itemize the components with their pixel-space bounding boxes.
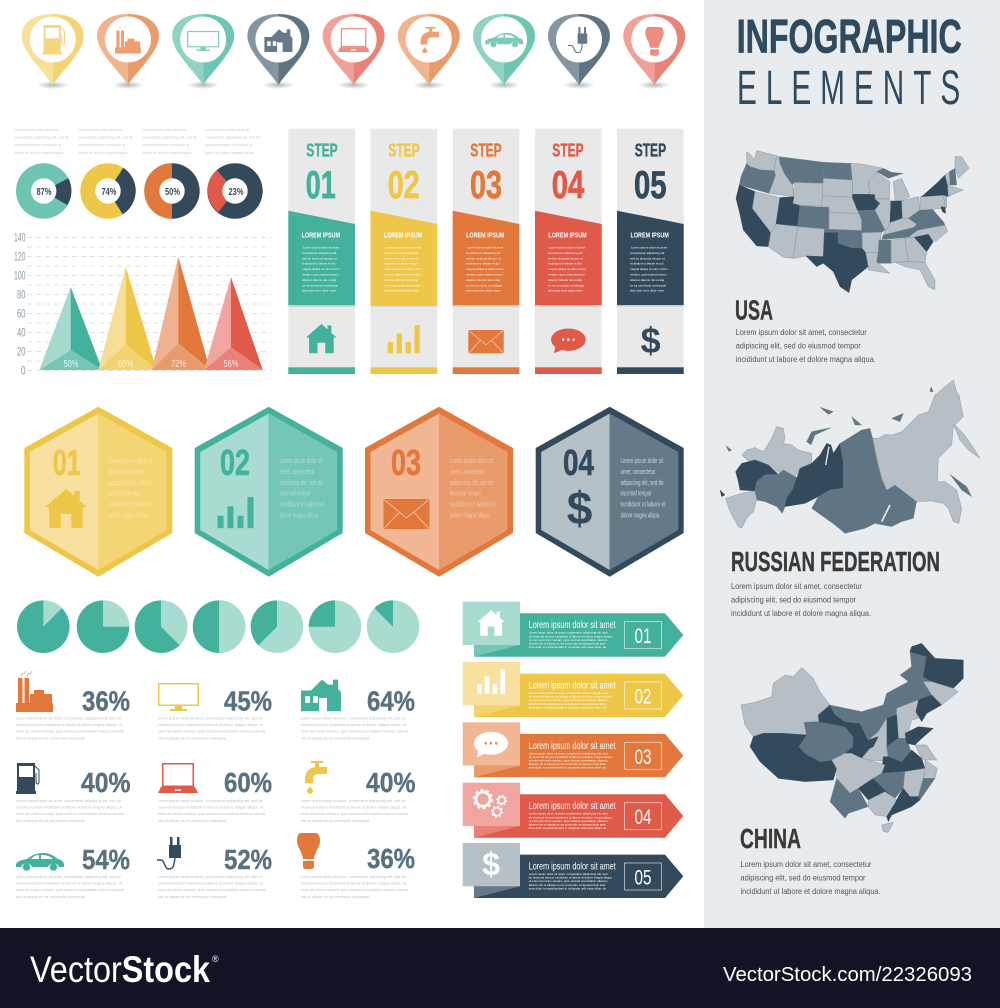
text: China: CHINA <box>740 823 801 854</box>
hexagon 04: adipiscing elit, sed do <box>620 478 664 487</box>
arrow banners <box>463 602 683 898</box>
stat: fuel pump 40%: enim ad minim veniam, quis nostrud exercitation ullamco laboris <box>16 812 124 816</box>
hexagon 03: Lorem ipsum dolor sit <box>450 456 494 465</box>
banner 04: laboris nisi ut aliquip ex ea commodo consequat duis aute <box>529 823 606 827</box>
step 05 card: consectetur adipiscing elit <box>630 251 665 255</box>
stat: house 64%: 64% <box>367 686 415 717</box>
stat: water tap 40%: 40% <box>366 767 416 798</box>
map: China <box>741 643 963 832</box>
hexagon 02: eiusmod tempor <box>280 488 311 498</box>
stat: laptop 60% <box>158 763 272 823</box>
captions above donuts: consectetur adipiscing elit, sed do <box>205 136 260 140</box>
text: China: Lorem ipsum dolor sit amet, consectetur <box>740 860 872 869</box>
stat: water tap 40%: eiusmod tempor incididunt ut labore et dolore magna aliqua. Ut <box>301 806 407 810</box>
banner 03: 03 <box>634 746 652 769</box>
banner 05: laboris nisi ut aliquip ex ea commodo consequat duis aute <box>529 883 606 887</box>
stat: house 64% <box>301 680 415 740</box>
captions above donuts: eiusmod tempor incididunt ut <box>142 143 189 147</box>
row of map pins <box>22 14 685 89</box>
text: Russian Federation: incididunt ut labore et dolore magna aliqua. <box>731 609 871 618</box>
step cards <box>288 129 684 374</box>
y axis labels: 20 <box>17 344 26 358</box>
step 01 card: duis aute irure dolor repre <box>302 289 337 293</box>
step 05 card: magna aliqua ut enim minim <box>630 267 668 271</box>
step 04 card: incididunt ut labore et dol <box>548 262 582 266</box>
stat: bulb 36%: eiusmod tempor incididunt ut labore et dolore magna aliqua. Ut <box>301 882 407 886</box>
triangle 56% <box>204 277 263 370</box>
banner 03: Lorem ipsum dolor sit amet <box>529 740 616 752</box>
text: USA: incididunt ut labore et dolore magna aliqua. <box>736 355 876 364</box>
step 03 card: ex ea commodo consequat <box>466 283 502 287</box>
captions above donuts: consectetur adipiscing elit, sed do <box>142 136 197 140</box>
stat: house 64%: enim ad minim veniam, quis nostrud exercitation ullamco laboris <box>301 730 408 734</box>
y axis labels: 40 <box>17 326 26 340</box>
stat: laptop 60%: nisi ut aliquip ex ea commodo consequat. <box>158 819 227 823</box>
text: Russian Federation <box>731 546 940 618</box>
hexagon 01: 01 <box>53 442 81 483</box>
stat: plug 52%: eiusmod tempor incididunt ut labore et dolore magna aliqua. Ut <box>158 882 264 886</box>
stat: television 45%: eiusmod tempor incididunt ut labore et dolore magna aliqua. Ut <box>158 723 264 727</box>
banner 01: irure dolor in reprehenderit in voluptate velit esse cillum do <box>529 645 607 649</box>
hexagon 01: incididunt ut labore et <box>109 500 155 508</box>
banner 02: Lorem ipsum dolor sit amet <box>529 680 616 692</box>
footer url: VectorStock.com/22326093 <box>723 964 972 986</box>
stat: house 64%: eiusmod tempor incididunt ut labore et dolore magna aliqua. Ut <box>301 723 407 727</box>
step 04 card: veniam, quis nostrud exerci <box>548 272 585 276</box>
step 03 card: incididunt ut labore et dol <box>466 262 500 266</box>
banner 02: laboris nisi ut aliquip ex ea commodo consequat duis aute <box>529 702 606 706</box>
step 05 card: veniam, quis nostrud exerci <box>630 272 667 276</box>
step 01 card: veniam, quis nostrud exerci <box>302 272 339 276</box>
pin: television <box>172 14 234 89</box>
stat: car 54%: eiusmod tempor incididunt ut labore et dolore magna aliqua. Ut <box>16 882 123 886</box>
icon: house <box>306 324 337 353</box>
icon: envelope <box>468 330 504 353</box>
step 03 card: STEP <box>470 140 502 160</box>
triangle 72%: 72% <box>171 359 186 370</box>
triangle 72% <box>152 257 210 370</box>
y axis labels <box>14 230 26 378</box>
stat: water tap 40% <box>301 761 416 823</box>
hexagon 01: eiusmod tempor <box>109 488 140 498</box>
step 01 card: ex ea commodo consequat <box>302 283 338 287</box>
hexagon 01: adipiscing elit, sed do <box>109 478 152 487</box>
hexagon 04: $ <box>567 482 592 534</box>
text: China: incididunt ut labore et dolore magna aliqua. <box>740 887 880 896</box>
stat: car 54%: nisi ut aliquip ex ea commodo consequat. <box>16 895 86 899</box>
hexagon 02: adipiscing elit, sed do <box>280 478 322 487</box>
stat: car 54% <box>16 844 130 899</box>
banner 01: Lorem ipsum dolor sit amet <box>529 619 616 631</box>
hexagon 04: incididunt ut labore et <box>620 500 666 508</box>
banner 03 <box>463 722 683 777</box>
hexagon 02: Lorem ipsum dolor sit <box>280 456 323 465</box>
step 05 card: ex ea commodo consequat <box>630 283 666 287</box>
step 03 card: LOREM IPSUM <box>466 231 504 240</box>
banner 03: Lorem ipsum dolor sit amet, consectetur adipiscing elit, sed <box>529 751 608 755</box>
banner 05: Lorem ipsum dolor sit amet, consectetur adipiscing elit, sed <box>529 872 608 876</box>
banner 05 <box>463 843 683 898</box>
stat: factory 36%: 36% <box>82 686 130 717</box>
step 05 card: sed do eiusmod tempor ut <box>630 256 665 260</box>
map: USA <box>736 151 969 293</box>
hexagon 04: Lorem ipsum dolor sit <box>620 456 664 465</box>
donut: 50%: 50% <box>165 187 180 198</box>
text: China <box>740 823 880 896</box>
hexagon panels <box>24 407 684 577</box>
stat: factory 36%: eiusmod tempor incididunt ut labore et dolore magna aliqua. Ut <box>16 723 123 727</box>
y axis labels: 80 <box>17 288 26 302</box>
hexagon 03 <box>365 407 513 577</box>
stat: bulb 36%: Lorem ipsum dolor sit amet, consectetur adipiscing elit, sed do <box>301 875 406 879</box>
step 04 card: Lorem ipsum dolor sit amet <box>549 246 585 250</box>
banner 01: laboris nisi ut aliquip ex ea commodo consequat duis aute <box>529 642 606 646</box>
hexagon 03: 03 <box>391 442 421 483</box>
step 03 card <box>453 129 519 374</box>
pin: car <box>473 14 535 89</box>
banner 03: irure dolor in reprehenderit in voluptate velit esse cillum do <box>529 766 607 770</box>
banner 05: ut enim ad minim veniam, quis nostrud exercitation ullamco <box>529 879 608 883</box>
banner 04: ut enim ad minim veniam, quis nostrud exercitation ullamco <box>529 819 608 823</box>
stat: house 64%: Lorem ipsum dolor sit amet, consectetur adipiscing elit, sed do <box>301 716 406 720</box>
y axis labels: 120 <box>14 250 26 264</box>
step 01 card <box>288 129 355 374</box>
step 02 card: ex ea commodo consequat <box>384 283 420 287</box>
donut: 87%: 87% <box>36 187 52 198</box>
captions above donuts: Lorem ipsum dolor sit amet, <box>142 128 188 132</box>
pin: house <box>247 14 309 89</box>
stat: plug 52%: Lorem ipsum dolor sit amet, consectetur adipiscing elit, sed do <box>158 875 263 879</box>
donut: 74% <box>80 163 136 219</box>
banner 05: do eiusmod tempor incididunt ut labore et dolore magna aliqua <box>529 876 612 880</box>
pin: factory <box>97 14 159 89</box>
step 03 card: sed do eiusmod tempor ut <box>466 256 501 260</box>
hexagon 03: adipiscing elit, sed do <box>450 478 493 487</box>
captions above donuts: labore et dolore magna aliqua. <box>14 151 64 155</box>
map: Russia <box>720 380 980 533</box>
step 04 card: 04 <box>552 164 585 207</box>
hexagon 04: amet, consectetur <box>620 467 656 476</box>
step 02 card <box>370 129 437 374</box>
hexagon 03: amet, consectetur <box>450 467 485 476</box>
step 04 card: ex ea commodo consequat <box>548 283 584 287</box>
stat: factory 36%: Lorem ipsum dolor sit amet, consectetur adipiscing elit, sed do <box>16 716 121 720</box>
banner 05: 05 <box>634 866 652 890</box>
stat: car 54%: Lorem ipsum dolor sit amet, consectetur adipiscing elit, sed do <box>16 875 121 879</box>
stat: plug 52%: enim ad minim veniam, quis nostrud exercitation ullamco laboris <box>158 888 265 892</box>
donut: 50% <box>144 163 200 219</box>
stat: car 54%: 54% <box>82 844 130 875</box>
banner 02: Lorem ipsum dolor sit amet, consectetur adipiscing elit, sed <box>529 691 608 695</box>
donut: 23%: 23% <box>228 187 244 198</box>
step 03 card: duis aute irure dolor repre <box>466 289 501 293</box>
y axis labels: 140 <box>14 230 26 244</box>
hexagon 01 <box>24 407 172 577</box>
title: ELEMENTS <box>737 62 960 115</box>
stat: television 45%: 45% <box>224 686 272 717</box>
banner 05: $ <box>482 846 500 882</box>
step 04 card: duis aute irure dolor repre <box>548 289 583 293</box>
step 04 card: LOREM IPSUM <box>548 231 587 240</box>
banner 01: ut enim ad minim veniam, quis nostrud exercitation ullamco <box>529 638 608 642</box>
captions above donuts: consectetur adipiscing elit, sed do <box>14 136 69 140</box>
stat: fuel pump 40%: 40% <box>81 767 131 798</box>
step 04 card <box>535 129 602 374</box>
stat: television 45%: nisi ut aliquip ex ea commodo consequat. <box>158 736 227 740</box>
stat: laptop 60%: Lorem ipsum dolor sit amet, consectetur adipiscing elit, sed do <box>158 799 263 803</box>
donut: 87% <box>16 163 71 219</box>
step 05 card: incididunt ut labore et dol <box>630 262 664 266</box>
step 02 card: STEP <box>388 140 420 160</box>
captions above donuts: Lorem ipsum dolor sit amet, <box>205 128 250 132</box>
captions above donuts <box>14 128 260 155</box>
footer bar <box>0 928 1000 1008</box>
hexagon 01: dolore magna aliqua. <box>109 510 149 520</box>
hexagon 04: dolore magna aliqua. <box>620 510 660 520</box>
footer logo: VectorStock <box>30 949 210 990</box>
stat: plug 52%: 52% <box>224 844 272 875</box>
banner 04: Lorem ipsum dolor sit amet <box>529 800 616 812</box>
stat: plug 52% <box>157 837 272 899</box>
captions above donuts: eiusmod tempor incididunt ut <box>78 143 125 147</box>
right side panel <box>704 0 1000 928</box>
step 01 card: ullamco laboris nisi ut aliq <box>302 278 337 282</box>
captions above donuts: eiusmod tempor incididunt ut <box>14 143 61 147</box>
stat: television 45%: Lorem ipsum dolor sit amet, consectetur adipiscing elit, sed do <box>158 716 263 720</box>
captions above donuts: labore et dolore magna aliqua. <box>78 151 128 155</box>
captions above donuts: consectetur adipiscing elit, sed do <box>78 136 133 140</box>
step 02 card: veniam, quis nostrud exerci <box>384 272 421 276</box>
step 01 card: consectetur adipiscing elit <box>302 251 337 255</box>
hexagon 04: 04 <box>563 442 594 483</box>
step 03 card: ullamco laboris nisi ut aliq <box>466 278 501 282</box>
banner 04: irure dolor in reprehenderit in voluptate velit esse cillum do <box>529 826 607 830</box>
banner 04: do eiusmod tempor incididunt ut labore et dolore magna aliqua <box>529 815 612 819</box>
text: Russian Federation: Lorem ipsum dolor sit amet, consectetur <box>731 582 862 591</box>
row of pie charts <box>17 600 419 653</box>
stat: water tap 40%: Lorem ipsum dolor sit amet, consectetur adipiscing elit, sed do <box>301 799 406 803</box>
triangle 50% <box>39 287 102 370</box>
banner 03: ut enim ad minim veniam, quis nostrud exercitation ullamco <box>529 758 608 762</box>
step 05 card: ullamco laboris nisi ut aliq <box>630 278 665 282</box>
icon: dollar: $ <box>641 320 661 361</box>
pin: laptop <box>323 14 385 89</box>
text: USA: USA <box>735 294 773 325</box>
banner 05: irure dolor in reprehenderit in voluptate velit esse cillum do <box>529 886 607 890</box>
triangle 65%: 65% <box>118 359 133 370</box>
y axis labels: 0 <box>21 364 26 378</box>
step 02 card: 02 <box>388 164 420 207</box>
icon: bars <box>388 325 420 353</box>
icon: speech bubble <box>551 329 586 353</box>
step 04 card: magna aliqua ut enim minim <box>548 267 586 271</box>
step 04 card: STEP <box>552 140 584 160</box>
step 01 card: magna aliqua ut enim minim <box>302 267 340 271</box>
text: Russian Federation: adipiscing elit, sed do eiusmod tempor <box>731 596 856 604</box>
step 03 card: consectetur adipiscing elit <box>466 251 501 255</box>
stat: bulb 36%: 36% <box>367 843 415 874</box>
text: USA: Lorem ipsum dolor sit amet, consectetur <box>736 328 867 337</box>
banner 04: Lorem ipsum dolor sit amet, consectetur adipiscing elit, sed <box>529 812 608 816</box>
stat: fuel pump 40% <box>16 763 131 823</box>
banner 03: do eiusmod tempor incididunt ut labore et dolore magna aliqua <box>529 755 612 759</box>
stat: house 64%: nisi ut aliquip ex ea commodo consequat. <box>301 736 370 740</box>
stat: bulb 36%: nisi ut aliquip ex ea commodo consequat. <box>301 895 370 899</box>
donut: 23% <box>207 163 263 219</box>
stat: laptop 60%: enim ad minim veniam, quis nostrud exercitation ullamco laboris <box>158 812 265 816</box>
step 01 card: incididunt ut labore et dol <box>302 262 336 266</box>
stat: laptop 60%: eiusmod tempor incididunt ut labore et dolore magna aliqua. Ut <box>158 806 264 810</box>
statistics grid <box>16 671 416 899</box>
step 02 card: sed do eiusmod tempor ut <box>384 256 419 260</box>
banner 02: irure dolor in reprehenderit in voluptate velit esse cillum do <box>529 705 607 709</box>
hexagon 02: amet, consectetur <box>280 467 315 476</box>
stat: television 45%: enim ad minim veniam, quis nostrud exercitation ullamco laboris <box>158 730 265 734</box>
captions above donuts: Lorem ipsum dolor sit amet, <box>14 128 60 132</box>
captions above donuts: labore et dolore magna aliqua. <box>142 151 192 155</box>
step 01 card: sed do eiusmod tempor ut <box>302 256 337 260</box>
stat: car 54%: enim ad minim veniam, quis nostrud exercitation ullamco laboris <box>16 888 124 892</box>
step 04 card: sed do eiusmod tempor ut <box>548 256 583 260</box>
hexagon 02 <box>195 407 343 577</box>
hexagon 03: eiusmod tempor <box>450 488 481 498</box>
donut: 74%: 74% <box>102 187 117 198</box>
hexagon 04 <box>536 407 684 577</box>
step 01 card: 01 <box>306 164 336 207</box>
banner 01: 01 <box>634 625 652 648</box>
banner 01 <box>463 602 683 657</box>
triangle bar chart <box>14 230 271 378</box>
pin: light bulb <box>623 14 685 89</box>
banner 01: Lorem ipsum dolor sit amet, consectetur adipiscing elit, sed <box>529 631 608 635</box>
registered mark: ® <box>212 954 219 964</box>
step 01 card: STEP <box>306 140 338 160</box>
step 01 card: LOREM IPSUM <box>302 231 340 240</box>
hexagon 01: Lorem ipsum dolor sit <box>109 456 153 465</box>
step 05 card: duis aute irure dolor repre <box>630 289 665 293</box>
triangle 50%: 50% <box>64 359 79 370</box>
y axis labels: 60 <box>17 306 26 320</box>
step 02 card: Lorem ipsum dolor sit amet <box>385 246 421 250</box>
stat: water tap 40%: nisi ut aliquip ex ea commodo consequat. <box>301 819 370 823</box>
banner 02 <box>463 662 683 717</box>
captions above donuts: Lorem ipsum dolor sit amet, <box>78 128 124 132</box>
banner 02: ut enim ad minim veniam, quis nostrud exercitation ullamco <box>529 698 608 702</box>
stat: fuel pump 40%: nisi ut aliquip ex ea commodo consequat. <box>16 819 86 823</box>
step 05 card: Lorem ipsum dolor sit amet <box>631 246 667 250</box>
stat: fuel pump 40%: eiusmod tempor incididunt ut labore et dolore magna aliqua. Ut <box>16 806 123 810</box>
banner 03: laboris nisi ut aliquip ex ea commodo consequat duis aute <box>529 762 606 766</box>
pin: fuel pump <box>22 14 84 89</box>
stat: television 45% <box>158 683 272 740</box>
step 05 card: LOREM IPSUM <box>630 231 669 240</box>
banner 01: do eiusmod tempor incididunt ut labore et dolore magna aliqua <box>529 634 612 638</box>
step 02 card: incididunt ut labore et dol <box>384 262 418 266</box>
stat: water tap 40%: enim ad minim veniam, quis nostrud exercitation ullamco laboris <box>301 812 408 816</box>
step 02 card: magna aliqua ut enim minim <box>384 267 422 271</box>
step 02 card: duis aute irure dolor repre <box>384 289 419 293</box>
stat: plug 52%: nisi ut aliquip ex ea commodo consequat. <box>158 895 227 899</box>
text: USA <box>735 294 876 364</box>
triangle 65% <box>98 267 157 370</box>
banner 05: Lorem ipsum dolor sit amet <box>529 860 616 872</box>
stat: bulb 36%: enim ad minim veniam, quis nostrud exercitation ullamco laboris <box>301 888 408 892</box>
hexagon 04: eiusmod tempor <box>620 488 652 498</box>
y axis labels: 100 <box>14 268 26 282</box>
stat: laptop 60%: 60% <box>224 767 272 798</box>
hexagon 02: dolore magna aliqua. <box>280 510 320 520</box>
step 05 card <box>617 129 684 374</box>
banner 04 <box>463 783 683 838</box>
donut charts <box>16 163 263 219</box>
step 04 card: ullamco laboris nisi ut aliq <box>548 278 583 282</box>
stat: fuel pump 40%: Lorem ipsum dolor sit amet, consectetur adipiscing elit, sed do <box>16 799 121 803</box>
hexagon 02: 02 <box>220 442 250 483</box>
stat: factory 36%: enim ad minim veniam, quis nostrud exercitation ullamco laboris <box>16 730 124 734</box>
stat: bulb 36% <box>297 833 415 899</box>
step 03 card: veniam, quis nostrud exerci <box>466 272 503 276</box>
step 02 card: ullamco laboris nisi ut aliq <box>384 278 419 282</box>
banner 02: do eiusmod tempor incididunt ut labore et dolore magna aliqua <box>529 695 612 699</box>
text: China: adipiscing elit, sed do eiusmod tempor <box>740 874 866 882</box>
text: USA: adipiscing elit, sed do eiusmod tempor <box>736 342 861 350</box>
hexagon 03: incididunt ut labore et <box>450 500 496 508</box>
hexagon 03: dolore magna aliqua. <box>450 510 490 520</box>
stat: factory 36% <box>16 671 130 740</box>
step 03 card: Lorem ipsum dolor sit amet <box>467 246 503 250</box>
step 02 card: LOREM IPSUM <box>384 231 422 240</box>
step 03 card: magna aliqua ut enim minim <box>466 267 504 271</box>
triangle 56%: 56% <box>224 359 239 370</box>
banner 02: 02 <box>634 686 652 708</box>
step 05 card: STEP <box>635 140 666 160</box>
hexagon 01: amet, consectetur <box>109 467 144 476</box>
step 04 card: consectetur adipiscing elit <box>548 251 583 255</box>
pin: plug <box>548 14 610 89</box>
step 03 card: 03 <box>470 164 502 207</box>
hexagon 02: incididunt ut labore et <box>280 500 325 508</box>
pin: water tap <box>398 14 460 89</box>
captions above donuts: labore et dolore magna aliqua. <box>205 151 255 155</box>
step 02 card: consectetur adipiscing elit <box>384 251 419 255</box>
banner 04: 04 <box>634 806 652 829</box>
stat: factory 36%: nisi ut aliquip ex ea commodo consequat. <box>16 736 86 740</box>
step 05 card: 05 <box>634 164 667 207</box>
title <box>737 10 962 115</box>
step 01 card: Lorem ipsum dolor sit amet <box>303 246 339 250</box>
captions above donuts: eiusmod tempor incididunt ut <box>205 143 252 147</box>
